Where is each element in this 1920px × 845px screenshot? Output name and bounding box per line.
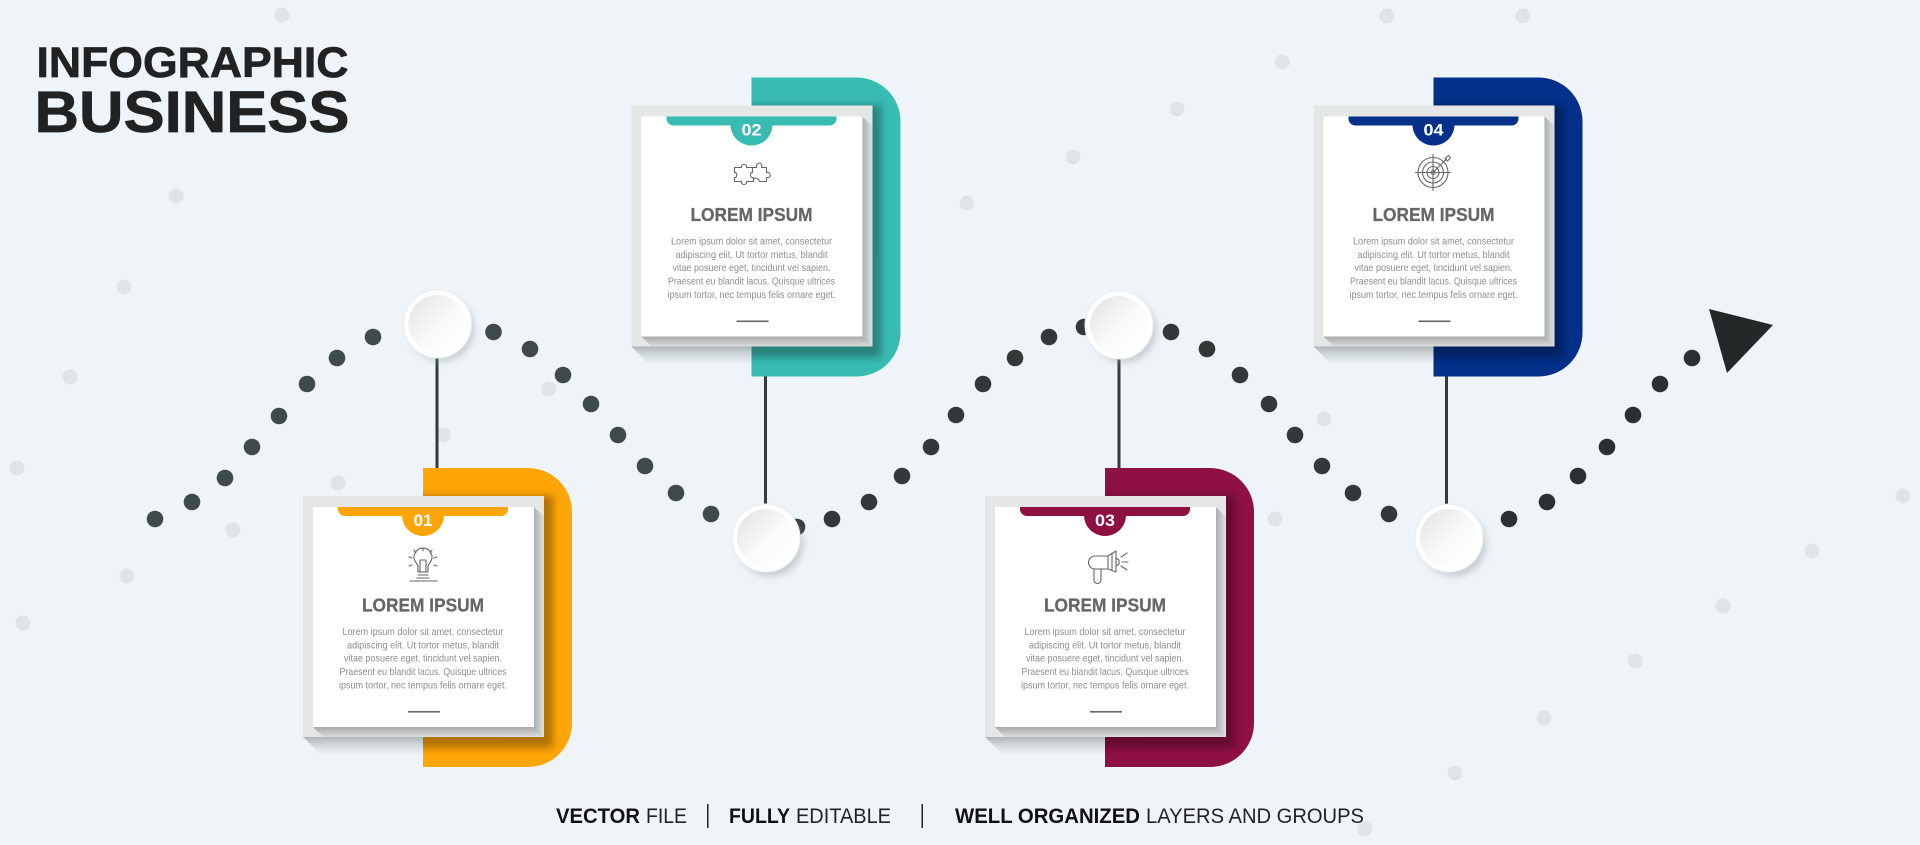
body text 03: Lorem ipsum dolor sit amet, consectetur bbox=[1024, 627, 1186, 638]
number 03: 03 bbox=[1095, 511, 1115, 530]
icon: light bulb bbox=[409, 548, 437, 581]
body text 03: ipsum tortor, nec tempus felis ornare eget. bbox=[1021, 680, 1189, 691]
body text 03: adipiscing elit. Ut tortor metus, blandit bbox=[1029, 640, 1181, 651]
body text 01: Lorem ipsum dolor sit amet, consectetur bbox=[342, 627, 504, 638]
dash 01 bbox=[408, 711, 440, 713]
number 01: 01 bbox=[414, 511, 432, 530]
tab 03 bbox=[1020, 507, 1190, 536]
colour panel 04 bbox=[1434, 78, 1582, 376]
body text 04: adipiscing elit. Ut tortor metus, blandit bbox=[1358, 250, 1510, 261]
frame 03 bbox=[985, 496, 1226, 737]
icon: puzzle bbox=[734, 163, 770, 184]
body text 04 bbox=[1350, 236, 1518, 301]
footer caption: VECTOR bbox=[556, 805, 640, 828]
number 04: 04 bbox=[1424, 120, 1444, 140]
dotted path bbox=[147, 319, 1700, 535]
body text 01: ipsum tortor, nec tempus felis ornare eget. bbox=[339, 680, 507, 691]
body text 04: ipsum tortor, nec tempus felis ornare eget. bbox=[1350, 290, 1518, 301]
heading 03: LOREM IPSUM bbox=[1044, 594, 1166, 616]
frame 01 bbox=[303, 496, 544, 737]
frame 04 bbox=[1314, 106, 1554, 346]
number 02: 02 bbox=[742, 120, 762, 140]
heading 04: LOREM IPSUM bbox=[1372, 204, 1494, 225]
card 03 bbox=[985, 468, 1254, 767]
footer caption: EDITABLE bbox=[796, 805, 891, 828]
heading 01: LOREM IPSUM bbox=[362, 594, 484, 616]
colour panel 03 bbox=[1105, 468, 1254, 767]
body text 02: adipiscing elit. Ut tortor metus, blandit bbox=[676, 250, 828, 261]
card 01 bbox=[303, 468, 572, 767]
title: INFOGRAPHIC bbox=[36, 39, 348, 87]
connector 3 bbox=[1118, 350, 1120, 470]
footer caption: WELL ORGANIZED bbox=[955, 805, 1140, 828]
body text 02 bbox=[668, 236, 836, 301]
tab 01 bbox=[338, 507, 508, 536]
tab 02 bbox=[666, 116, 836, 146]
tab 04 bbox=[1348, 116, 1518, 146]
card 02 bbox=[632, 78, 900, 376]
connector 1 bbox=[436, 350, 438, 470]
node 1 bbox=[404, 290, 474, 361]
body text 01: Praesent eu blandit lacus. Quisque ultrices bbox=[340, 667, 506, 678]
body text 02: ipsum tortor, nec tempus felis ornare eget. bbox=[668, 290, 836, 301]
body text 04: Praesent eu blandit lacus. Quisque ultrices bbox=[1350, 276, 1517, 288]
dash 03 bbox=[1090, 711, 1122, 713]
connector 2 bbox=[764, 375, 767, 510]
body text 03 bbox=[1021, 627, 1189, 691]
colour panel 02 bbox=[752, 78, 900, 376]
footer caption bbox=[556, 804, 1364, 828]
footer caption: FULLY bbox=[729, 805, 790, 828]
body text 04: Lorem ipsum dolor sit amet, consectetur bbox=[1353, 236, 1515, 248]
body text 02: Praesent eu blandit lacus. Quisque ultrices bbox=[668, 276, 835, 288]
icon: megaphone bbox=[1088, 551, 1128, 584]
node 2 bbox=[732, 504, 803, 576]
colour panel 01 bbox=[423, 468, 572, 767]
body text 02: vitae posuere eget, tincidunt vel sapien. bbox=[672, 263, 830, 274]
dash 04 bbox=[1418, 320, 1450, 322]
footer caption: FILE bbox=[646, 805, 687, 828]
heading 02: LOREM IPSUM bbox=[690, 204, 812, 225]
icon: target bbox=[1416, 154, 1450, 190]
card 04 bbox=[1314, 78, 1582, 376]
body text 01 bbox=[339, 627, 507, 691]
arrow head bbox=[1709, 309, 1773, 373]
dash 02 bbox=[736, 320, 768, 322]
body text 04: vitae posuere eget, tincidunt vel sapien. bbox=[1354, 263, 1512, 274]
node 4 bbox=[1415, 504, 1486, 576]
node 3 bbox=[1085, 291, 1156, 362]
body text 02: Lorem ipsum dolor sit amet, consectetur bbox=[671, 236, 833, 248]
connector 4 bbox=[1445, 375, 1448, 510]
body text 01: adipiscing elit. Ut tortor metus, blandit bbox=[347, 640, 499, 651]
footer caption: LAYERS AND GROUPS bbox=[1146, 805, 1364, 828]
title bbox=[34, 39, 350, 145]
body text 01: vitae posuere eget, tincidunt vel sapien. bbox=[344, 654, 502, 665]
body text 03: vitae posuere eget, tincidunt vel sapien. bbox=[1026, 654, 1184, 665]
body text 03: Praesent eu blandit lacus. Quisque ultrices bbox=[1022, 667, 1188, 678]
title: BUSINESS bbox=[34, 80, 350, 145]
frame 02 bbox=[632, 106, 872, 346]
